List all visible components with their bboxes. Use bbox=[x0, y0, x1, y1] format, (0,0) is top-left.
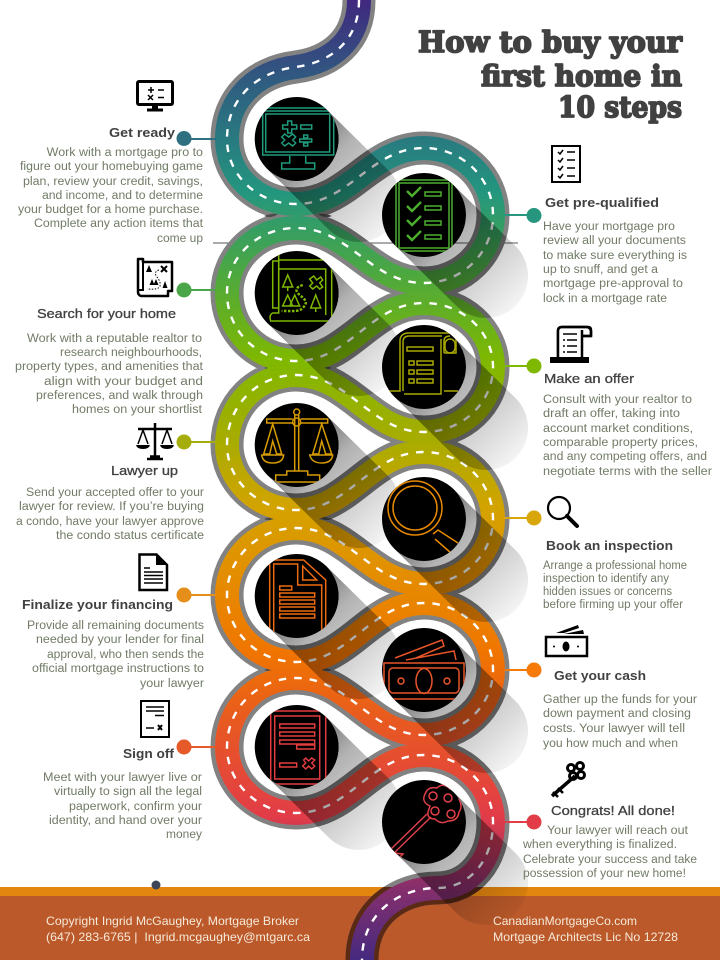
icon: monitor bbox=[138, 82, 172, 112]
heading: Make an offer bbox=[544, 371, 635, 386]
circle icon: monitor bbox=[255, 97, 339, 181]
heading: Book an inspection bbox=[546, 538, 673, 553]
circle icon: checklist bbox=[382, 173, 466, 257]
body text: and income, and to determine bbox=[42, 190, 203, 202]
body text: align with your budget and bbox=[44, 376, 203, 388]
step: Finalize your financing bbox=[22, 554, 204, 690]
body text: official mortgage instructions to bbox=[32, 663, 204, 675]
footer contact text right: CanadianMortgageCo.com bbox=[493, 914, 637, 928]
body text: virtually to sign all the legal bbox=[54, 786, 202, 798]
body text: paperwork, confirm your bbox=[69, 801, 202, 813]
body text: property types, and amenities that bbox=[15, 361, 204, 373]
body text: comparable property prices, bbox=[543, 437, 698, 449]
body text: your lawyer bbox=[140, 678, 204, 690]
heading: Lawyer up bbox=[111, 463, 178, 478]
icon: checklist bbox=[552, 146, 580, 182]
step: Sign off bbox=[43, 701, 202, 841]
body text: Provide all remaining documents bbox=[27, 620, 204, 632]
body text: negotiate terms with the seller bbox=[543, 466, 712, 478]
body text: Consult with your realtor to bbox=[543, 394, 692, 406]
step: Get ready bbox=[18, 82, 204, 245]
body text: draft an offer, taking into bbox=[543, 408, 680, 420]
body text: mortgage pre-approval to bbox=[543, 278, 683, 290]
heading: Congrats! All done! bbox=[551, 803, 675, 818]
heading: Get your cash bbox=[554, 668, 646, 683]
heading: Sign off bbox=[123, 746, 175, 761]
body text: inspection to identify any bbox=[543, 573, 669, 585]
body text: when everything is finalized. bbox=[522, 839, 677, 851]
winding road bbox=[227, 0, 493, 960]
footer contact text right bbox=[493, 914, 678, 944]
body text: money bbox=[166, 829, 202, 841]
body text: hidden issues or concerns bbox=[543, 586, 672, 598]
body text: Your lawyer will reach out bbox=[547, 825, 689, 837]
title bbox=[418, 25, 683, 124]
circle icon: magnifier bbox=[382, 477, 466, 561]
step: Get your cash bbox=[543, 625, 697, 750]
body text: homes on your shortlist bbox=[72, 404, 203, 416]
small dot above footer bbox=[152, 880, 160, 890]
body text: needed by your lender for final bbox=[36, 634, 204, 646]
icon: magnifier bbox=[548, 497, 577, 526]
body text bbox=[543, 560, 687, 611]
icon: map bbox=[138, 259, 172, 296]
footer contact text right: Mortgage Architects Lic No 12728 bbox=[493, 930, 678, 944]
body text: you how much and when bbox=[543, 738, 678, 750]
circle icon: scales bbox=[255, 403, 339, 487]
icon: cash bbox=[546, 625, 587, 656]
heading: Search for your home bbox=[37, 306, 176, 321]
icon: scroll bbox=[550, 327, 591, 363]
body text: research neighbourhoods, bbox=[60, 347, 202, 359]
body text: come up bbox=[157, 233, 203, 245]
circle icon: signature document bbox=[255, 705, 339, 789]
body text bbox=[522, 825, 697, 880]
step: Make an offer bbox=[543, 327, 712, 478]
body text: Work with a mortgage pro to bbox=[47, 147, 203, 159]
body text bbox=[15, 333, 204, 416]
body text: lawyer for review. If you’re buying bbox=[19, 501, 204, 513]
body text: Celebrate your success and take bbox=[523, 854, 697, 866]
body text: to make sure everything is bbox=[543, 250, 687, 262]
step: Search for your home bbox=[15, 259, 204, 416]
body text: Work with a reputable realtor to bbox=[27, 333, 202, 345]
body text bbox=[27, 620, 204, 690]
circle icon: cash bbox=[382, 628, 466, 712]
body text: Meet with your lawyer live or bbox=[43, 772, 202, 784]
step: Congrats! All done! bbox=[522, 762, 697, 880]
circle icon: offer scroll bbox=[382, 325, 466, 409]
footer contact text left: Copyright Ingrid McGaughey, Mortgage Broker bbox=[46, 914, 299, 928]
body text: down payment and closing bbox=[543, 708, 691, 720]
body text: Complete any action items that bbox=[34, 218, 204, 230]
step: Lawyer up bbox=[16, 423, 204, 542]
body text bbox=[18, 147, 204, 245]
title: first home in bbox=[481, 59, 682, 93]
body text: a condo, have your lawyer approve bbox=[16, 516, 204, 528]
body text: plan, review your credit, savings, bbox=[23, 176, 203, 188]
footer contact text left bbox=[46, 914, 310, 944]
title: 10 steps bbox=[558, 90, 682, 124]
circle icon: key bbox=[382, 780, 466, 864]
icon: document bbox=[140, 554, 167, 590]
step: Book an inspection bbox=[543, 497, 687, 611]
body text: costs. Your lawyer will tell bbox=[543, 723, 685, 735]
body text: possession of your new home! bbox=[523, 868, 686, 880]
connector lines and dots bbox=[176, 131, 542, 830]
circle icon: map bbox=[255, 251, 339, 335]
body text bbox=[16, 487, 204, 542]
footer contact text left: (647) 283-6765 | Ingrid.mcgaughey@mtgarc.ca bbox=[46, 930, 310, 944]
heading: Finalize your financing bbox=[22, 597, 173, 612]
long shadows cast by the circles bbox=[297, 139, 486, 883]
icon: key bbox=[552, 762, 584, 797]
step: Get pre-qualified bbox=[543, 146, 687, 305]
icon: signed page bbox=[141, 701, 169, 737]
body text: before firming up your offer bbox=[543, 599, 683, 611]
body text bbox=[543, 394, 712, 478]
body text: the condo status certificate bbox=[56, 530, 204, 542]
body text: Gather up the funds for your bbox=[543, 694, 697, 706]
body text bbox=[543, 694, 697, 750]
footer band bbox=[0, 887, 720, 960]
heading: Get ready bbox=[109, 125, 176, 140]
heading: Get pre-qualified bbox=[545, 195, 659, 210]
body text: figure out your homebuying game bbox=[20, 161, 203, 173]
body text: identity, and hand over your bbox=[49, 815, 202, 827]
body text: up to snuff, and get a bbox=[543, 264, 659, 276]
body text bbox=[43, 772, 202, 841]
body text: lock in a mortgage rate bbox=[543, 293, 667, 305]
title: How to buy your bbox=[418, 25, 683, 59]
body text bbox=[543, 221, 687, 305]
body text: your budget for a home purchase. bbox=[18, 204, 203, 216]
body text: preferences, and walk through bbox=[36, 390, 203, 402]
body text: Arrange a professional home bbox=[543, 560, 687, 572]
body text: Have your mortgage pro bbox=[543, 221, 675, 233]
circle icon: document bbox=[255, 554, 339, 638]
body text: account market conditions, bbox=[543, 423, 693, 435]
body text: approval, who then sends the bbox=[47, 649, 204, 661]
body text: Send your accepted offer to your bbox=[26, 487, 204, 499]
icon: scales bbox=[136, 423, 174, 459]
body text: and any competing offers, and bbox=[543, 451, 707, 463]
body text: review all your documents bbox=[543, 235, 686, 247]
